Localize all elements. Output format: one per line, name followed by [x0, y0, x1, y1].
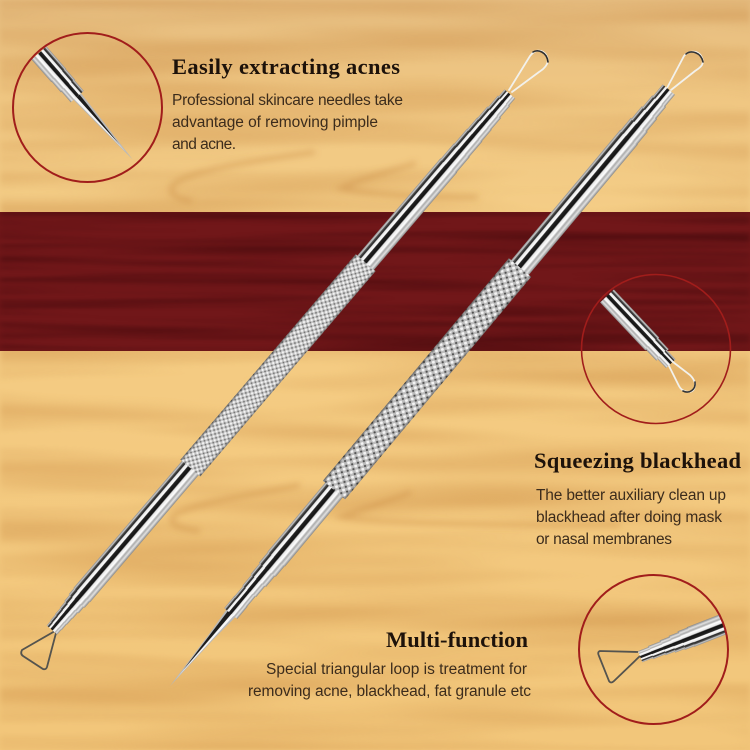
- text: multi-function description: removing acne, blackhead, fat granule etc: [248, 683, 531, 700]
- detail circle: teardrop loop: [582, 274, 730, 424]
- text: blackhead description: or nasal membranes: [536, 531, 672, 548]
- text: acne description: advantage of removing pimple: [172, 114, 378, 131]
- text: acne description: [172, 92, 403, 153]
- heading: Squeezing blackhead: Squeezing blackhead: [534, 448, 741, 473]
- icon: bottom triangle loop: [21, 631, 56, 669]
- heading: Easily extracting acnes: Easily extracting acnes: [172, 54, 400, 79]
- text: blackhead description: [536, 487, 726, 548]
- text: multi-function description: Special triangular loop is treatment for: [266, 661, 527, 678]
- detail circle: needle tip: [13, 33, 162, 182]
- text: acne description: Professional skincare needles take: [172, 92, 403, 109]
- text: blackhead description: blackhead after doing mask: [536, 509, 722, 526]
- text: acne description: and acne.: [172, 136, 236, 153]
- detail circle: triangular loop: [579, 575, 728, 724]
- right tool body: [159, 80, 680, 696]
- maroon wood band: [0, 212, 750, 351]
- text: multi-function description: [248, 661, 531, 700]
- icon: top teardrop loop: [667, 52, 703, 90]
- icon: top teardrop loop: [509, 51, 548, 92]
- tool: left extractor, triangle loop and teardrop loop: [21, 51, 548, 669]
- text: blackhead description: The better auxiliary clean up: [536, 487, 726, 504]
- left tool body: [42, 85, 520, 638]
- tool: right extractor, needle and teardrop loop: [159, 52, 703, 696]
- heading: Multi-function: Multi-function: [386, 627, 528, 652]
- needle tip: [165, 608, 237, 690]
